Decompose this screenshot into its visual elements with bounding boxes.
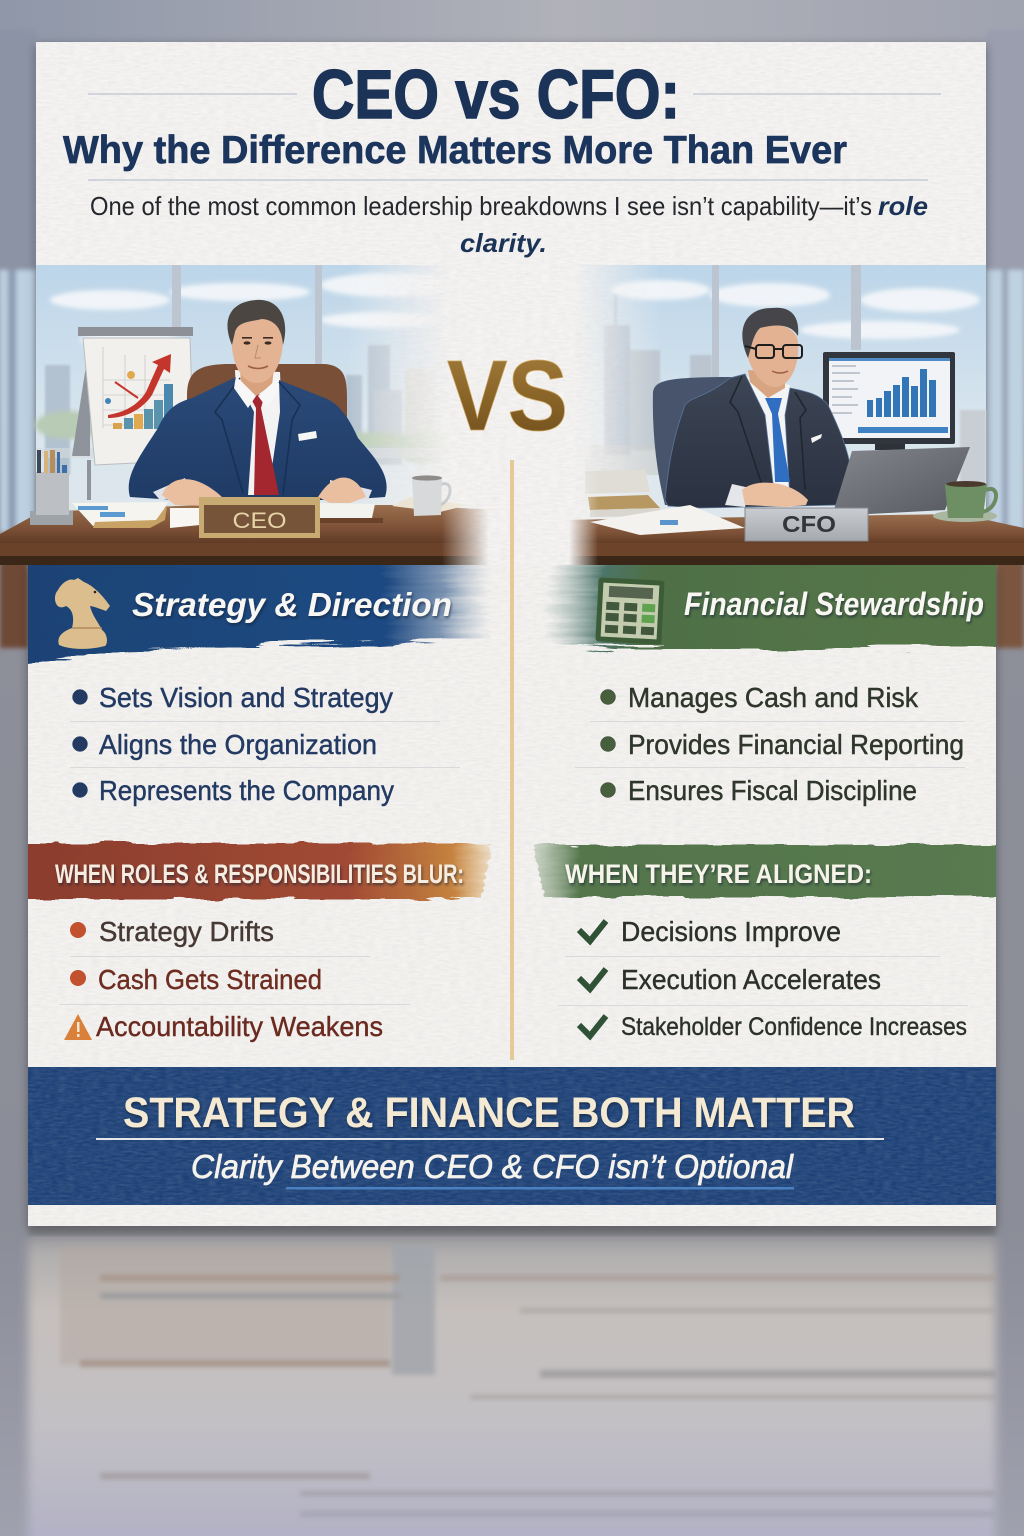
responsibility list: Ensures Fiscal Discipline: [628, 775, 917, 806]
cuffs and hands: [153, 478, 186, 500]
icon: check: [579, 969, 606, 989]
green mug: [933, 481, 997, 522]
responsibility list: [575, 682, 965, 806]
face: [232, 316, 283, 383]
desk: CEO: [0, 505, 500, 565]
clouds: [610, 280, 980, 339]
intro text: clarity.: [460, 228, 547, 258]
CEO nameplate: [199, 497, 320, 538]
document stack: [585, 470, 745, 535]
CFO figure: [665, 308, 851, 508]
blue tie: [765, 398, 790, 482]
responsibility list: Aligns the Organization: [99, 729, 377, 760]
consequences list: [60, 916, 410, 1042]
desk: CFO: [555, 514, 1024, 565]
CFO nameplate: [745, 508, 868, 541]
consequences list: Strategy Drifts: [99, 916, 274, 947]
center gold divider: [510, 460, 514, 1060]
benefits list: Stakeholder Confidence Increases: [621, 1013, 967, 1041]
responsibility list: Represents the Company: [99, 775, 394, 806]
red tie: [252, 394, 279, 495]
panel: strategy and direction: [10, 560, 490, 806]
coffee mug: [412, 475, 450, 516]
intro text: [90, 191, 928, 258]
collar: [234, 377, 272, 408]
left office scene: CEO: [0, 300, 500, 565]
icon: check: [579, 921, 606, 941]
executive chair: [187, 364, 347, 418]
glasses: [745, 345, 802, 358]
consequences list: Cash Gets Strained: [98, 964, 322, 995]
window frames: [712, 265, 861, 385]
title: CEO vs CFO:: [312, 56, 680, 133]
monitor: [823, 352, 955, 450]
benefits list: Execution Accelerates: [621, 964, 881, 995]
CFO nameplate: CFO: [782, 511, 836, 537]
responsibility list: [70, 682, 460, 806]
CEO nameplate: CEO: [232, 508, 286, 533]
footer banner: Clarity Between CEO & CFO isn’t Optional: [191, 1148, 795, 1185]
flipchart: [72, 327, 194, 500]
panel: strategy and direction: Strategy & Direction: [132, 586, 452, 623]
intro text: role: [878, 191, 928, 221]
paper grain texture: [28, 42, 996, 1226]
paper poster panel: [28, 42, 996, 1226]
panel: financial stewardship: Financial Stewardship: [684, 586, 984, 622]
window frames: [172, 265, 322, 375]
icon: warning triangle: [64, 1014, 92, 1040]
pocket square: [298, 431, 317, 441]
suit jacket: [665, 374, 851, 508]
panel: when roles blur: [10, 843, 492, 1042]
consequences list: Accountability Weakens: [96, 1011, 383, 1042]
eyes and mouth: [242, 337, 273, 345]
laptop: [832, 447, 970, 516]
neck and shirt: [235, 370, 280, 495]
responsibility list: Sets Vision and Strategy: [99, 682, 393, 713]
panel: financial stewardship: [545, 560, 1010, 806]
responsibility list: Manages Cash and Risk: [628, 682, 919, 713]
cuff and hand: [725, 484, 750, 507]
intro text: One of the most common leadership breakdowns I see isn’t capability—it’s: [90, 191, 872, 221]
office chair: [653, 377, 740, 505]
neck: [748, 370, 785, 398]
suit jacket: [129, 377, 387, 500]
skyline: [45, 345, 435, 475]
footer banner: [28, 1067, 996, 1205]
side shelf: [585, 445, 715, 475]
panel: when aligned: [533, 845, 1010, 1041]
subtitle: Why the Difference Matters More Than Ever: [63, 129, 847, 172]
icon: chess knight: [55, 578, 110, 649]
hair: [227, 300, 285, 345]
documents: [72, 497, 468, 528]
pen cup: [30, 450, 73, 525]
benefits list: Decisions Improve: [621, 916, 841, 947]
header rules: [88, 94, 941, 180]
panel: when aligned: WHEN THEY’RE ALIGNED:: [565, 859, 872, 889]
responsibility list: Provides Financial Reporting: [628, 729, 964, 760]
hair: [742, 308, 798, 358]
brush banner: blue: [10, 560, 490, 662]
trees: [35, 411, 453, 464]
neck: [240, 373, 274, 396]
VS emblem: VS: [447, 340, 568, 452]
right office scene: CFO: [555, 308, 1024, 565]
CEO figure: [129, 300, 387, 506]
brush banner: red: [10, 843, 492, 899]
face: [746, 324, 798, 387]
blurred floor reflection: [28, 1226, 996, 1536]
footer banner: STRATEGY & FINANCE BOTH MATTER: [123, 1089, 855, 1137]
icon: calculator: [595, 577, 665, 645]
benefits list: [558, 916, 968, 1041]
clouds: [50, 273, 460, 348]
left window view: [34, 265, 437, 511]
brush banner: green: [545, 560, 1010, 648]
skyline: [604, 295, 986, 500]
right window view: [540, 265, 986, 527]
brush banner: green: [533, 845, 1010, 897]
panel: when roles blur: WHEN ROLES & RESPONSIBILITIES BLUR:: [55, 859, 464, 889]
pocket square: [811, 434, 822, 443]
icon: check: [579, 1016, 606, 1036]
